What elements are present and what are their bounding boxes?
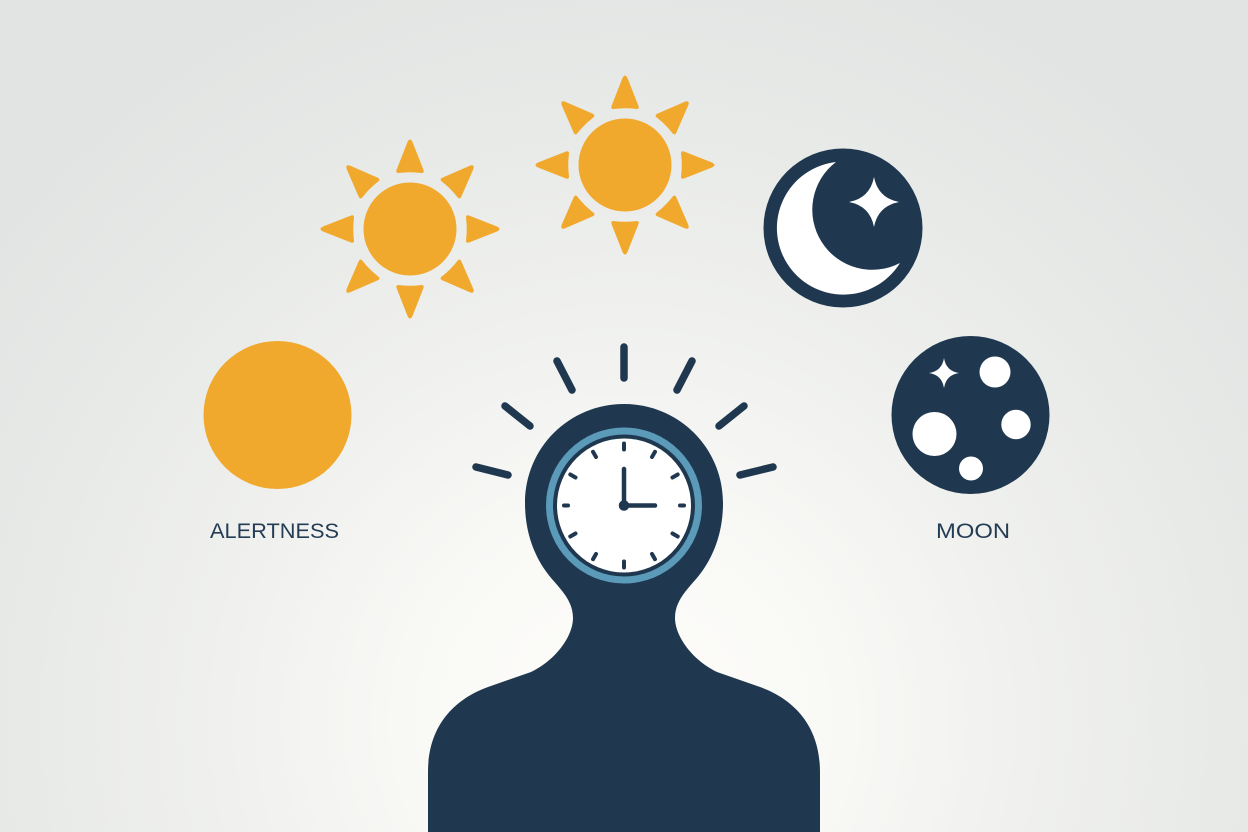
icon: alertness orange disc [204, 341, 352, 489]
icon: radiating alert lines [476, 347, 773, 475]
icon: crescent moon with star [764, 148, 922, 308]
icon: clock [546, 428, 702, 584]
clock hour ticks [564, 444, 684, 568]
label: alertness: ALERTNESS [210, 520, 339, 543]
icon: sun left [320, 140, 500, 318]
clock hands [621, 469, 655, 508]
label: moon: MOON [936, 520, 1010, 543]
icon: full moon with craters [892, 336, 1050, 494]
icon: sun top [536, 76, 714, 254]
figure: head and shoulders silhouette [428, 404, 820, 832]
